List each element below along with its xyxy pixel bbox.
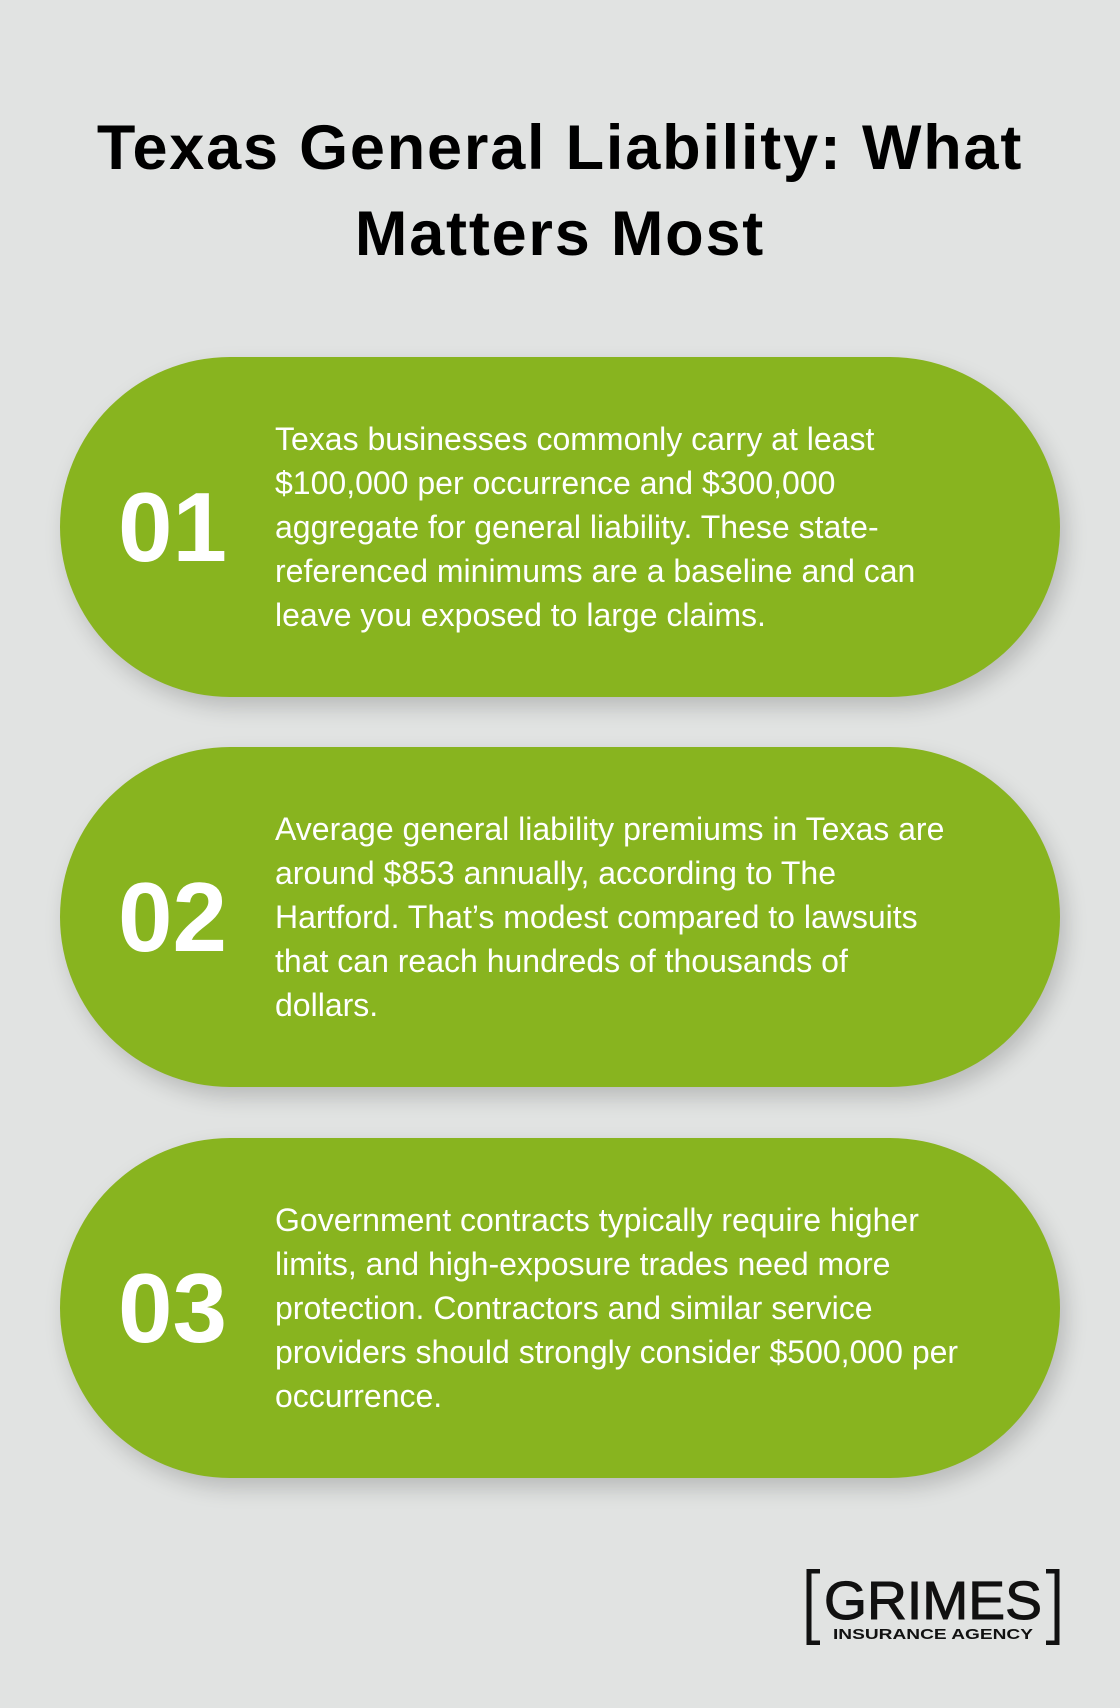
panel: item 01 xyxy=(60,357,1060,697)
panel: item 02 xyxy=(60,747,1060,1087)
logo: INSURANCE AGENCY xyxy=(833,1626,1033,1643)
text 01: Texas businesses commonly carry at least $100,000 per occurrence and $300,000 aggregate for general liability. These state-referenced minimums are a baseline and can leave you exposed to large claims. xyxy=(275,421,915,633)
text 02: dollars. xyxy=(275,987,378,1023)
title xyxy=(97,113,1023,269)
logo xyxy=(806,1569,1060,1645)
text 03: Government contracts typically require higher limits, and high-exposure trades need more protection. Contractors and similar service providers should strongly consider $500,000 per occurrence. xyxy=(275,1202,958,1414)
logo: GRIMES xyxy=(824,1571,1042,1631)
text 02: Average general liability premiums in Texas are around $853 annually, according to The Hartford. That’s modest compared to lawsuits that can reach hundreds of thousands of xyxy=(275,811,944,979)
number 02: 02 xyxy=(118,862,227,972)
number 03: 03 xyxy=(118,1253,227,1363)
panel: item 03 xyxy=(60,1138,1060,1478)
title: Texas General Liability: What xyxy=(97,113,1023,183)
number 01: 01 xyxy=(118,472,227,582)
title: Matters Most xyxy=(355,199,765,269)
